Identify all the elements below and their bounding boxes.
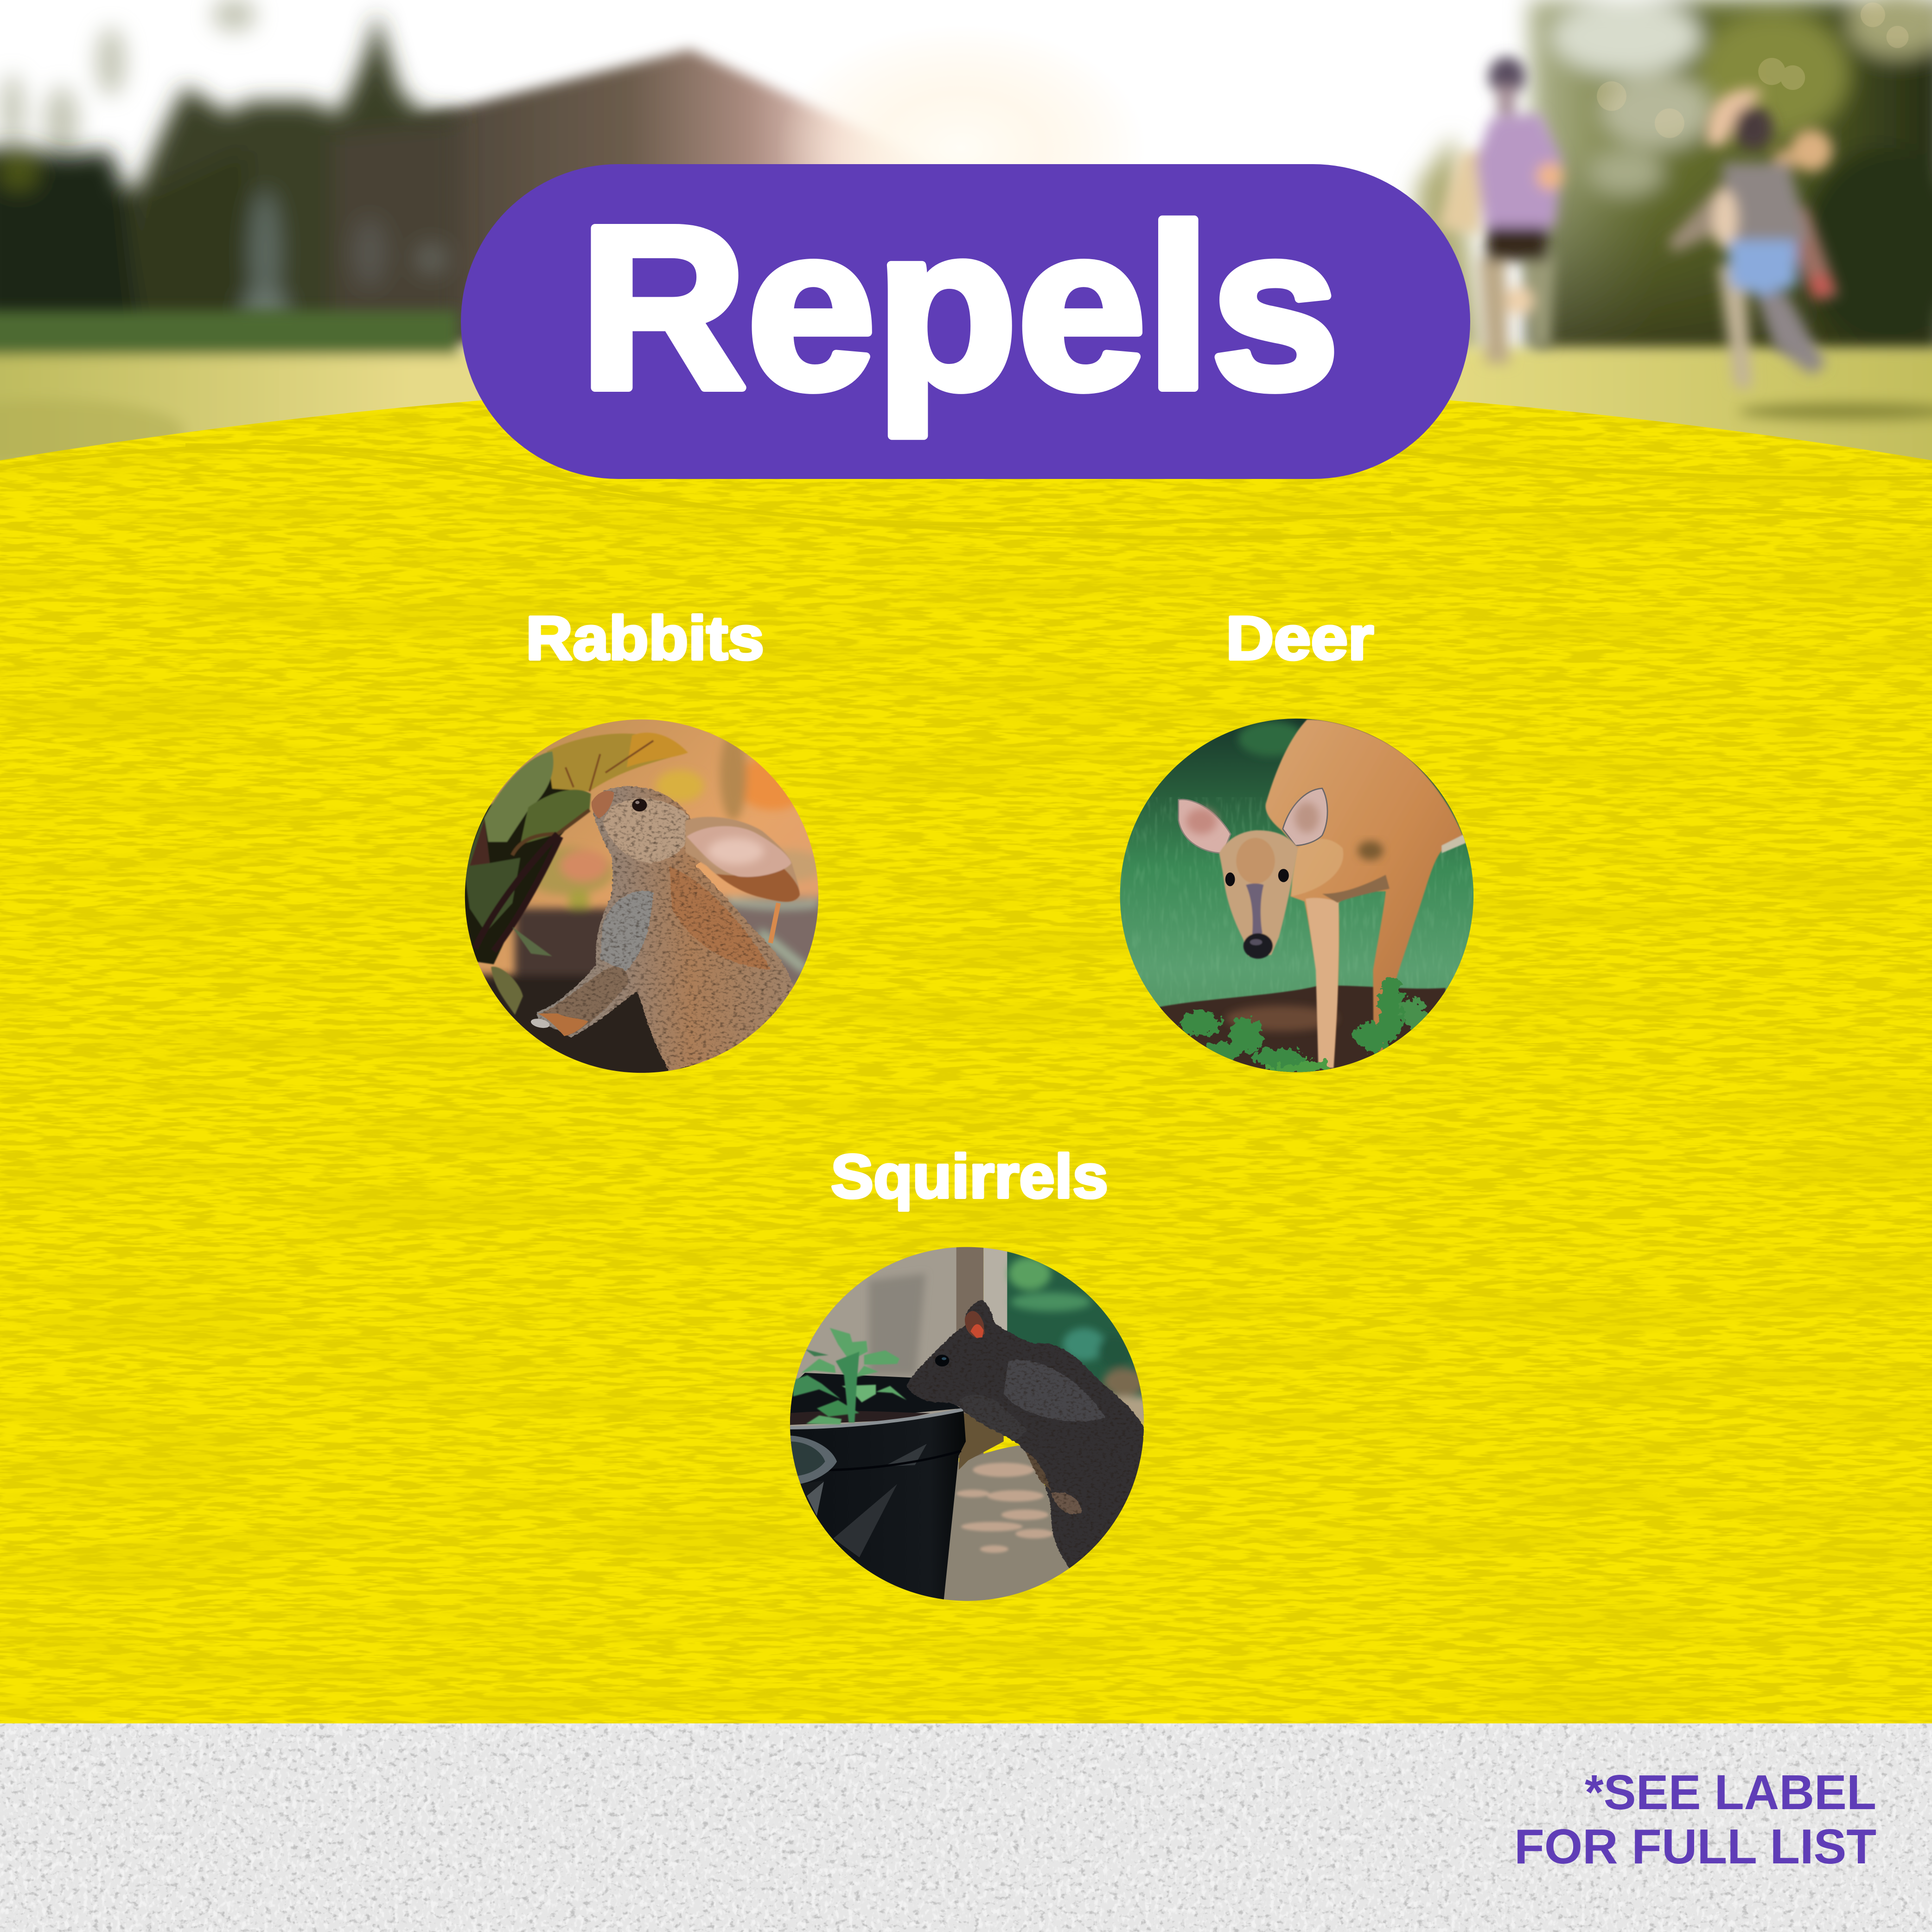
blurred trees on the left bbox=[0, 13, 459, 347]
small pot bbox=[790, 1435, 837, 1484]
title text: Repels bbox=[580, 178, 1339, 438]
photo circle: rabbit bbox=[456, 717, 826, 1081]
yellow painted wood panel bbox=[0, 278, 1932, 1723]
sun flare bbox=[776, 25, 1146, 271]
footnote text: FOR FULL LIST bbox=[1514, 1819, 1876, 1874]
heading: Squirrels: Squirrels bbox=[831, 1142, 1108, 1211]
rabbit nose and eye bbox=[592, 791, 614, 818]
rabbit ear bbox=[685, 817, 800, 902]
footnote text: *SEE LABEL bbox=[1585, 1765, 1876, 1820]
blurred child in lilac shirt bbox=[1438, 57, 1563, 363]
blurred lawn bbox=[0, 311, 1932, 483]
deer head bbox=[1219, 830, 1298, 959]
background photo: children running in a garden bbox=[0, 0, 1932, 483]
faint distant branches bbox=[0, 0, 256, 160]
blurred house bbox=[407, 49, 961, 345]
rabbit body bbox=[536, 786, 793, 1072]
seedling bbox=[793, 1328, 907, 1424]
photo circle: squirrel bbox=[788, 1245, 1150, 1605]
grey plaster footer band bbox=[0, 1723, 1932, 1932]
deer body bbox=[1266, 720, 1466, 1068]
leaves bbox=[462, 733, 688, 1015]
pavement bbox=[942, 1445, 1086, 1602]
squirrel bbox=[907, 1301, 1144, 1569]
squirrel ear and eye bbox=[965, 1311, 985, 1339]
heading: Rabbits: Rabbits bbox=[526, 604, 764, 673]
blurred trees on the right bbox=[1417, 0, 1932, 363]
dirt bed bbox=[1160, 985, 1446, 1077]
pot bbox=[788, 1409, 966, 1605]
title pill bbox=[461, 164, 1470, 479]
deer ears bbox=[1179, 799, 1231, 853]
bokeh highlights bbox=[1597, 2, 1908, 138]
photo circle: deer bbox=[1116, 716, 1480, 1077]
footnote text bbox=[1514, 1765, 1876, 1874]
heading: Deer: Deer bbox=[1226, 604, 1374, 673]
blurred child in blue shorts bbox=[1668, 89, 1838, 388]
foreground plants bbox=[1180, 975, 1427, 1076]
